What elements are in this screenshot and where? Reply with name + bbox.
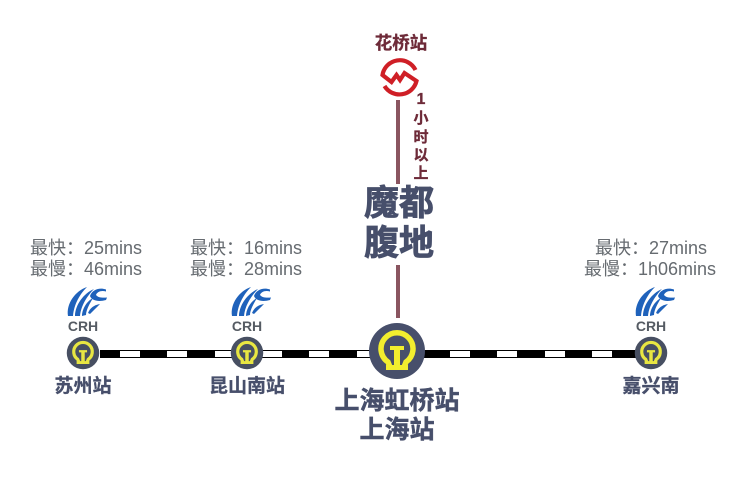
heading: city centre — [364, 184, 434, 263]
station name: Kunshan South: 昆山南站 — [209, 375, 285, 397]
travel times: Suzhou: 最慢：46mins — [30, 259, 142, 279]
travel time label: over one hour — [413, 91, 429, 182]
travel time label: over one hour: 以 — [413, 147, 429, 164]
travel time label: over one hour: 小 — [413, 110, 429, 127]
icon: railway badge, Shanghai Hongqiao — [369, 323, 425, 379]
icon: CRH logo, Jiaxing South — [636, 287, 675, 334]
travel time label: over one hour: 上 — [413, 165, 429, 182]
railway track — [100, 350, 640, 358]
heading: city centre: 魔都 — [364, 184, 434, 223]
heading: city centre: 腹地 — [364, 224, 434, 263]
heading: Huaqiao station: 花桥站 — [375, 33, 427, 53]
icon: railway badge, Suzhou — [67, 337, 99, 369]
travel times: Kunshan South: 最慢：28mins — [190, 259, 302, 279]
travel time label: over one hour: 1 — [417, 91, 426, 108]
station name: Suzhou: 苏州站 — [54, 375, 112, 397]
icon: railway badge, Jiaxing South — [635, 337, 667, 369]
station name: Shanghai Hongqiao and Shanghai: 上海虹桥站 — [334, 387, 460, 415]
connector line: Huaqiao to city centre — [396, 100, 400, 184]
station name: Jiaxing South: 嘉兴南 — [622, 375, 680, 397]
station name: Shanghai Hongqiao and Shanghai: 上海站 — [359, 416, 435, 444]
station name: Shanghai Hongqiao and Shanghai — [334, 387, 460, 444]
travel times: Kunshan South: 最快：16mins — [190, 238, 302, 258]
travel times: Suzhou: 最快：25mins — [30, 238, 142, 258]
connector line: city centre to Hongqiao — [396, 265, 400, 318]
travel times: Suzhou — [30, 238, 142, 279]
icon: Shanghai metro logo — [382, 60, 416, 94]
icon: CRH logo, Jiaxing South: CRH — [636, 318, 666, 334]
icon: CRH logo, Suzhou: CRH — [68, 318, 98, 334]
icon: CRH logo, Kunshan South — [232, 287, 271, 334]
travel times: Jiaxing South: 最快：27mins — [595, 238, 707, 258]
icon: railway badge, Kunshan South — [231, 337, 263, 369]
travel times: Jiaxing South: 最慢：1h06mins — [584, 259, 716, 279]
travel time label: over one hour: 时 — [413, 129, 429, 146]
travel times: Jiaxing South — [584, 238, 716, 279]
travel times: Kunshan South — [190, 238, 302, 279]
icon: CRH logo, Suzhou — [68, 287, 107, 334]
icon: CRH logo, Kunshan South: CRH — [232, 318, 262, 334]
